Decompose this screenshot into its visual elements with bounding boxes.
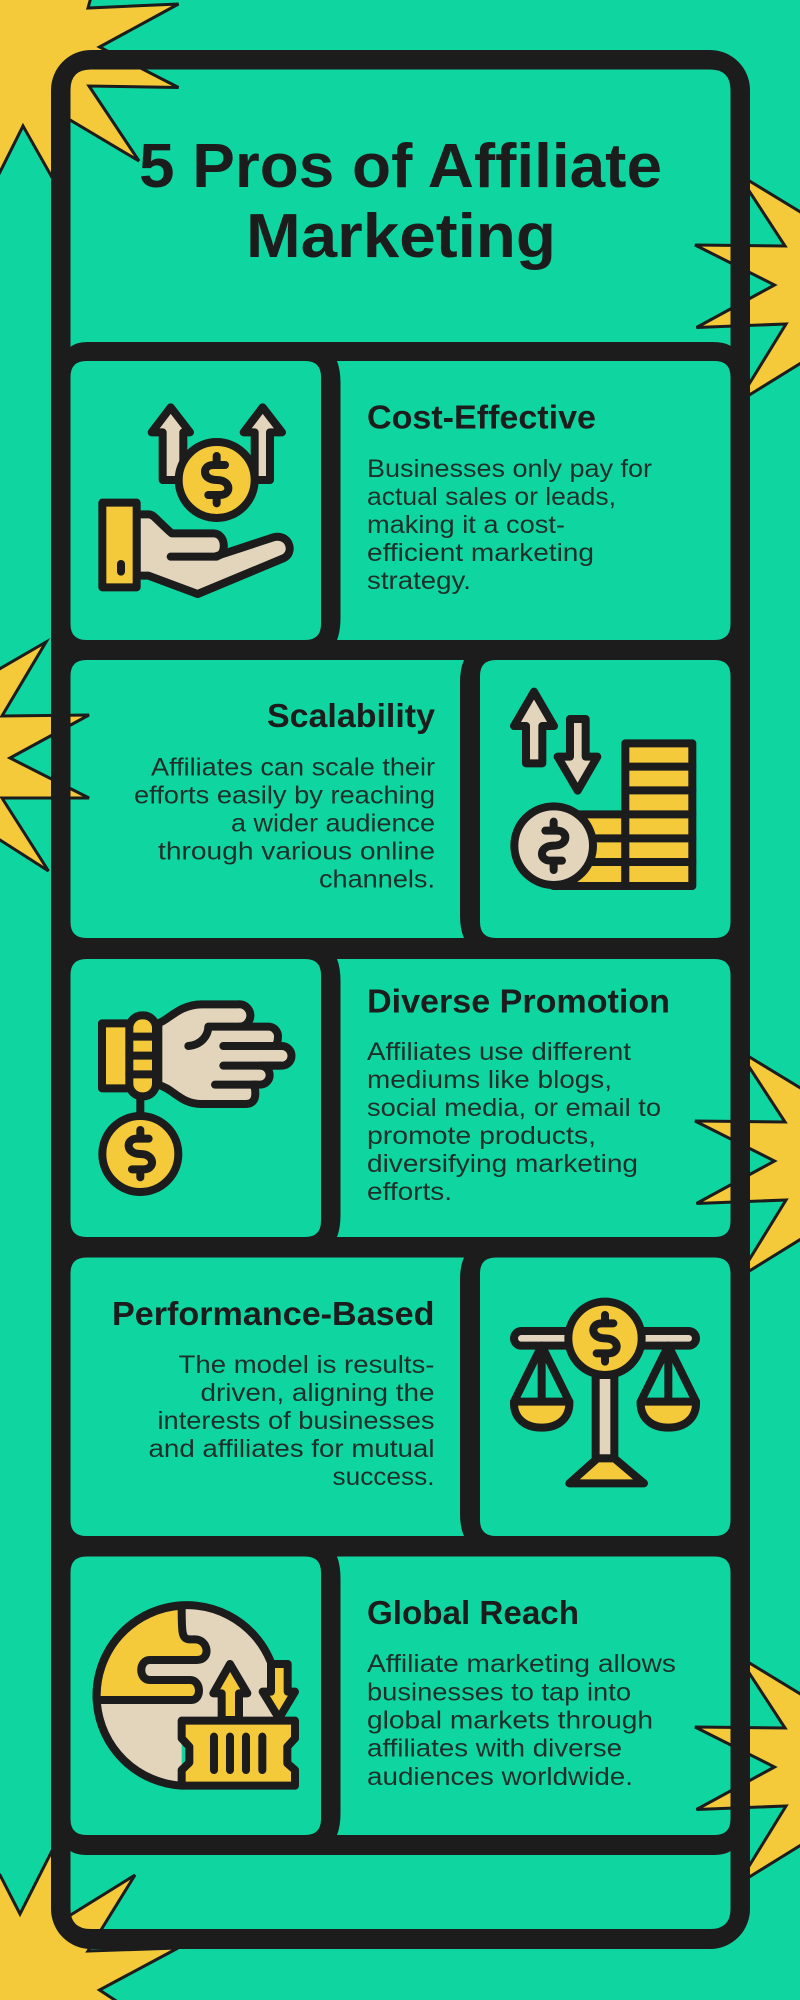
heading: Diverse Promotion bbox=[367, 982, 670, 1020]
body text: diversifying marketing bbox=[367, 1150, 638, 1178]
body text: businesses to tap into bbox=[367, 1678, 631, 1706]
body text: global markets through bbox=[367, 1706, 653, 1734]
body text: The model is results- bbox=[178, 1351, 434, 1379]
title: 5 Pros of Affiliate bbox=[139, 132, 662, 201]
body text: affiliates with diverse bbox=[367, 1734, 622, 1762]
panel: cost-effective bbox=[70, 361, 730, 640]
body text: and affiliates for mutual bbox=[148, 1435, 434, 1463]
decorative starburst: right middle bbox=[695, 1050, 800, 1278]
body text: making it a cost- bbox=[367, 511, 565, 539]
icon: balance scale with dollar coin bbox=[514, 1302, 696, 1483]
body text: efficient marketing bbox=[367, 539, 594, 567]
decorative starburst: right lower bbox=[695, 1656, 800, 1884]
body text: efforts. bbox=[367, 1178, 452, 1206]
heading: Cost-Effective bbox=[367, 398, 596, 436]
icon: coin stacks with up and down arrows bbox=[514, 692, 692, 886]
body text bbox=[367, 1038, 661, 1206]
decorative starburst: right upper bbox=[695, 174, 800, 402]
title: Marketing bbox=[246, 202, 556, 271]
body text: Affiliates use different bbox=[367, 1038, 631, 1066]
panel: performance-based bbox=[70, 1257, 730, 1536]
body text: promote products, bbox=[367, 1122, 596, 1150]
icon: globe with shipping container and arrows bbox=[97, 1605, 295, 1786]
panel: diverse promotion bbox=[70, 959, 730, 1237]
body text: social media, or email to bbox=[367, 1094, 661, 1122]
body text: mediums like blogs, bbox=[367, 1066, 612, 1094]
heading: Scalability bbox=[267, 697, 436, 734]
body text: Businesses only pay for bbox=[367, 455, 652, 483]
body text: a wider audience bbox=[231, 810, 435, 838]
icon: hand with dollar coin and up arrows bbox=[102, 407, 290, 594]
body text: audiences worldwide. bbox=[367, 1763, 633, 1791]
decorative starburst: left middle bbox=[0, 642, 89, 871]
body text bbox=[367, 455, 652, 595]
body text bbox=[134, 754, 435, 894]
body text: through various online bbox=[158, 838, 435, 866]
body text bbox=[148, 1351, 434, 1491]
body text: actual sales or leads, bbox=[367, 483, 616, 511]
body text: strategy. bbox=[367, 567, 471, 595]
title bbox=[139, 132, 662, 271]
body text: Affiliate marketing allows bbox=[367, 1650, 676, 1678]
icon: hand with wristband and hanging coin bbox=[102, 1004, 291, 1192]
decorative starburst: bottom left bbox=[0, 1835, 178, 2000]
body text: interests of businesses bbox=[158, 1407, 434, 1435]
body text: Affiliates can scale their bbox=[151, 754, 435, 782]
body text bbox=[367, 1650, 676, 1791]
body text: efforts easily by reaching bbox=[134, 782, 435, 810]
body text: success. bbox=[332, 1463, 434, 1491]
body text: channels. bbox=[319, 866, 435, 894]
heading: Performance-Based bbox=[112, 1295, 434, 1332]
body text: driven, aligning the bbox=[200, 1379, 434, 1407]
panel: global reach bbox=[70, 1556, 730, 1835]
heading: Global Reach bbox=[367, 1594, 579, 1631]
panel: scalability bbox=[70, 660, 730, 938]
decorative starburst: top left bbox=[0, 0, 178, 195]
